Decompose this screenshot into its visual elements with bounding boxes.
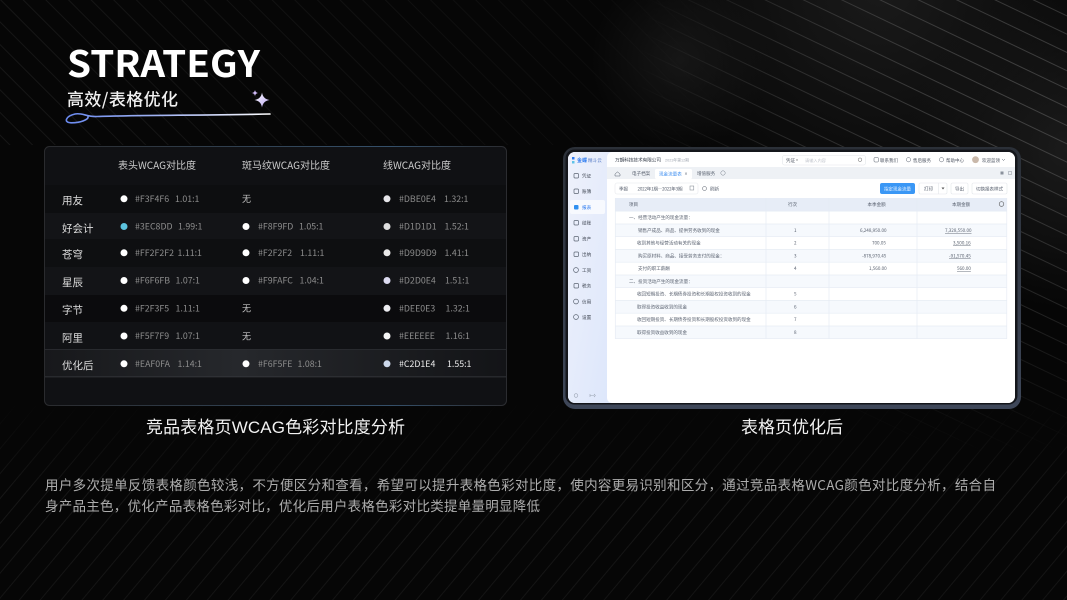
table rows: 700.05 <box>872 240 886 246</box>
table rows <box>629 214 972 336</box>
row: 好会计: 1.05:1 <box>299 220 324 233</box>
row: 用友: 用友 <box>62 193 83 208</box>
row: 字节: 无 <box>242 302 251 314</box>
row: 苍穹: 1.11:1 <box>178 246 202 259</box>
table rows: 一、经营活动产生的现金流量： <box>629 214 693 221</box>
caption: optimized table page: 表格页优化后 <box>741 418 843 437</box>
table rows: 6 <box>794 304 797 310</box>
toolbar: 导出 <box>955 186 965 192</box>
table header: 线WCAG对比度 <box>383 157 451 172</box>
row: 好会计: #3EC8DD <box>135 220 173 233</box>
table header cells: 行次 <box>788 201 798 208</box>
toolbar: 指定现金流量 <box>884 186 912 192</box>
main area <box>607 152 1017 403</box>
table header <box>118 157 451 172</box>
row: 优化后: 1.08:1 <box>298 357 322 370</box>
row: 优化后: #C2D1E4 <box>399 357 435 370</box>
panel: tablet screenshot <box>563 147 1021 409</box>
toolbar: 季报 <box>619 186 629 192</box>
row: 星辰: 星辰 <box>62 275 83 290</box>
table rows: 4 <box>794 266 797 272</box>
table rows: 收回短期投资、长期债券投资和长期股权投资收到的现金 <box>637 316 751 323</box>
tab bar: × <box>684 172 688 178</box>
row: 阿里: 阿里 <box>62 330 83 346</box>
top bar: 帮助中心 <box>946 157 964 164</box>
top bar: 万朝科技技术有限公司 <box>615 156 661 164</box>
row: 苍穹: 苍穹 <box>62 247 83 262</box>
row: 用友: 1.01:1 <box>175 192 200 205</box>
title: STRATEGY <box>67 35 261 88</box>
body description <box>45 474 996 515</box>
row: 字节: #DEE0E3 <box>399 302 435 314</box>
table rows: 6,248,950.00 <box>860 228 887 234</box>
row: 阿里 <box>62 329 470 346</box>
row: 优化后: 优化后 <box>62 358 94 373</box>
logo: 金蝶 <box>577 157 587 164</box>
table rows: 7,328,550.00 <box>945 228 972 234</box>
top bar: 请输入内容 <box>805 157 826 164</box>
table rows: 1,560.00 <box>869 266 887 272</box>
top bar: 欢迎蓝领 <box>982 157 1000 164</box>
row: 阿里: #F5F7F9 <box>135 329 169 342</box>
panel: WCAG contrast table <box>44 146 506 406</box>
row: 星辰: #F6F6FB <box>135 274 170 287</box>
table rows: 二、投资活动产生的现金流量： <box>629 278 693 285</box>
subtitle: 高效/表格优化 <box>67 86 178 110</box>
row: 苍穹 <box>62 246 469 262</box>
row: 苍穹: #FF2F2F2 <box>135 246 174 259</box>
tab bar: 增值服务 <box>697 170 716 177</box>
row: 星辰: 1.07:1 <box>176 274 200 287</box>
data table <box>615 198 1007 339</box>
row: 星辰: 1.51:1 <box>445 274 470 287</box>
row: 好会计: 1.52:1 <box>444 220 469 233</box>
caption: competitor analysis: 竞品表格页WCAG色彩对比度分析 <box>146 418 405 437</box>
table rows: -91,570.45 <box>949 254 971 260</box>
table header cells: 本季金额 <box>868 201 886 208</box>
row: 苍穹: 1.41:1 <box>444 246 469 259</box>
row: 用友: 无 <box>242 192 251 205</box>
top bar: 售后服务 <box>913 157 931 164</box>
underline swoosh <box>66 114 270 123</box>
table header cells: 本期金额 <box>952 201 971 208</box>
top bar: 凭证 <box>786 157 795 164</box>
body description: 用户多次提单反馈表格颜色较浅，不方便区分和查看，希望可以提升表格色彩对比度，使内容更易识别和区分，通过竞品表格WCAG颜色对比度分析，结合自 <box>45 474 996 494</box>
row: 好会计: 好会计 <box>62 221 94 236</box>
tab bar: 现金流量表 <box>659 170 682 178</box>
table rows: 支付的职工薪酬 <box>638 265 670 272</box>
table rows: -878,970.45 <box>862 254 887 260</box>
menu items <box>574 172 592 321</box>
row: 阿里: #EEEEEE <box>399 329 435 342</box>
table rows: 收到其他与经营活动有关的现金 <box>637 240 701 246</box>
row: 好会计: #D1D1D1 <box>399 220 437 233</box>
table rows: 1 <box>794 228 797 234</box>
table rows: 7 <box>794 317 797 323</box>
tab bar: 电子档案 <box>632 170 651 177</box>
table rows: 销售产成品、商品、提供劳务收到的现金 <box>638 227 720 234</box>
table rows: 5 <box>794 292 797 298</box>
row: 苍穹: #D9D9D9 <box>399 246 437 259</box>
table header: 斑马纹WCAG对比度 <box>242 157 330 172</box>
row: 星辰: #D2D0E4 <box>399 274 436 287</box>
table rows: 收回短期投资、长期债券投资和长期股权投资收到的现金 <box>637 290 751 298</box>
row: 好会计: #F8F9FD <box>258 220 293 233</box>
logo: 精斗云 <box>588 157 602 164</box>
toolbar: 刷新 <box>710 186 720 192</box>
top bar <box>615 156 1005 165</box>
top bar: 2023年第12期 <box>665 158 689 162</box>
row: 好会计 <box>62 220 469 236</box>
menu items: 信用 <box>582 298 592 306</box>
row: 字节: 字节 <box>62 302 83 318</box>
row: 用友: #F3F4F6 <box>135 192 169 205</box>
table rows: 取得投资收益收到的现金 <box>637 329 687 336</box>
toolbar: 切换报表样式 <box>976 186 1003 192</box>
table rows: 2 <box>794 240 797 246</box>
row: 优化后 <box>62 357 472 373</box>
row: 优化后: 1.55:1 <box>447 357 472 370</box>
menu items: 出纳 <box>582 251 592 258</box>
table header cells <box>629 201 1004 207</box>
row: 阿里: 1.07:1 <box>176 329 200 342</box>
row: 星辰: #F9FAFC <box>258 274 293 287</box>
row: 星辰: 1.04:1 <box>300 274 324 287</box>
table header: 表头WCAG对比度 <box>118 157 196 172</box>
row: 阿里: 无 <box>242 330 251 342</box>
toolbar: 2022年1期—2022年3期 <box>638 186 683 192</box>
row: 星辰 <box>62 274 470 290</box>
table rows: 3 <box>794 254 797 260</box>
row: 阿里: 1.16:1 <box>446 329 470 342</box>
menu items: 资产 <box>582 236 592 242</box>
table rows: 3,500.16 <box>953 240 971 246</box>
menu items: 设置 <box>582 314 592 321</box>
row: 字节: 1.32:1 <box>446 302 470 314</box>
sidebar footer icons <box>574 394 595 397</box>
table rows: 购买原材料、商品、接受劳务支付的现金： <box>638 252 724 260</box>
table header cells: 项目 <box>629 202 638 208</box>
row: 字节 <box>62 302 470 318</box>
menu items: 凭证 <box>582 172 592 180</box>
row: 苍穹: 1.11:1 <box>300 246 325 259</box>
sidebar <box>568 152 614 403</box>
icon: sparkle <box>252 90 270 108</box>
table rows: 取得投资收益收到的现金 <box>637 304 687 310</box>
menu items: 工资 <box>582 267 592 274</box>
top bar: 联系我们 <box>880 157 898 164</box>
row: 优化后: #F6F5FE <box>258 357 292 370</box>
row: 优化后: 1.14:1 <box>178 357 202 370</box>
row: 用友 <box>62 192 469 208</box>
table rows: 560.00 <box>957 266 971 272</box>
row: 苍穹: #F2F2F2 <box>258 246 292 259</box>
body description: 身产品主色，优化产品表格色彩对比，优化后用户表格色彩对比类提单量明显降低 <box>45 495 540 515</box>
tab bar <box>607 167 1017 179</box>
toolbar: 打印 <box>924 186 934 192</box>
row: 字节: 1.11:1 <box>176 302 200 314</box>
toolbar <box>615 183 1007 194</box>
row: 好会计: 1.99:1 <box>178 220 203 233</box>
logo <box>572 157 602 164</box>
menu items: 税务 <box>582 282 592 290</box>
menu items: 报表 <box>582 204 592 211</box>
table rows: 8 <box>794 330 797 336</box>
row: 用友: #DBE0E4 <box>399 192 436 205</box>
menu items: 账簿 <box>582 188 592 195</box>
row: 字节: #F2F3F5 <box>135 302 169 314</box>
menu items: 结账 <box>582 220 592 226</box>
row: 用友: 1.32:1 <box>444 192 469 205</box>
row: 优化后: #EAF0FA <box>135 357 171 370</box>
